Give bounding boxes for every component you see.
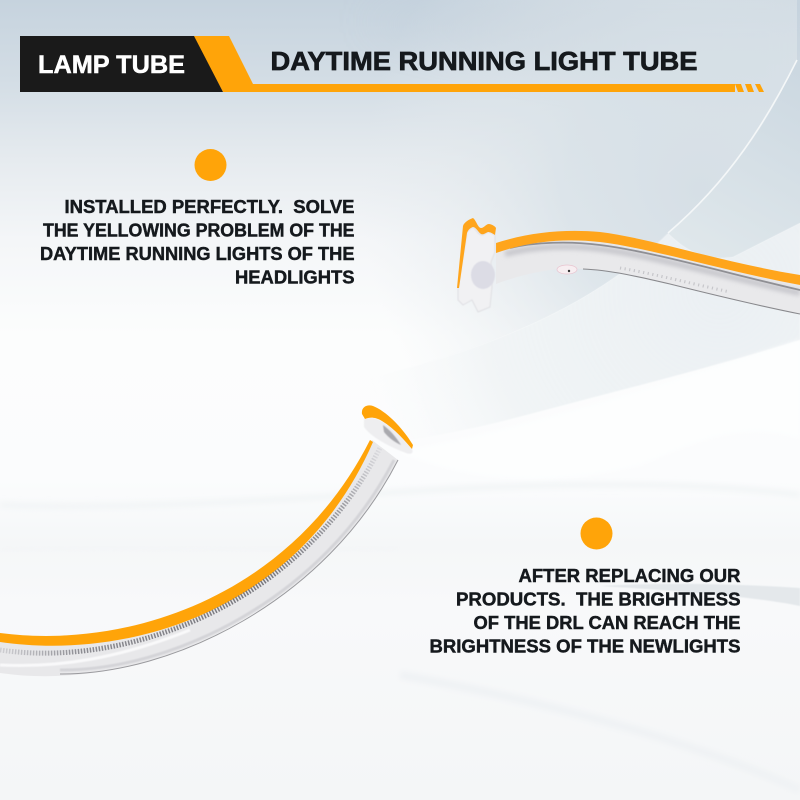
text block: after replacing: OF THE DRL CAN REACH THE [474, 613, 740, 633]
disc orange rim [362, 405, 413, 449]
main title: DAYTIME RUNNING LIGHT TUBE [270, 48, 698, 76]
orange header slash and underline [193, 36, 735, 92]
pink mark [557, 265, 577, 274]
black badge [20, 36, 223, 92]
orange strip [496, 231, 800, 285]
disc shading [383, 425, 401, 445]
text block: after replacing [430, 566, 741, 656]
orange strip [0, 440, 373, 646]
disc end cap [364, 418, 413, 454]
text block: installed perfectly: INSTALLED PERFECTLY. SOLVE [64, 197, 354, 217]
text block: after replacing: BRIGHTNESS OF THE NEWLIGHTS [430, 636, 740, 656]
text block: installed perfectly: DAYTIME RUNNING LIGHTS OF THE [40, 244, 354, 264]
tube lower edge [583, 269, 800, 314]
background swoosh: white lower band [400, 340, 800, 479]
badge label: LAMP TUBE [38, 51, 185, 79]
text block: installed perfectly: HEADLIGHTS [235, 268, 354, 288]
cap orange edge [457, 218, 496, 288]
tube lower edge [60, 460, 398, 674]
background streaks [0, 485, 800, 506]
tube body [496, 240, 800, 314]
background swoosh: right panel [668, 56, 800, 258]
cap lens [471, 261, 495, 289]
tube shading band [505, 247, 800, 293]
background: blue top-right tint [350, 0, 800, 120]
background swoosh: upper shaded sweep [340, 0, 797, 385]
tube inner dark line [510, 243, 800, 290]
text block: after replacing: AFTER REPLACING OUR [518, 566, 741, 586]
marker dot: top text [194, 149, 226, 181]
end cap [458, 228, 495, 312]
text block: installed perfectly: THE YELLOWING PROBLEM OF THE [43, 220, 354, 240]
comb teeth [0, 448, 380, 653]
text block: after replacing: PRODUCTS. THE BRIGHTNESS [456, 590, 740, 610]
white highlight [0, 630, 190, 666]
text block: installed perfectly [40, 197, 354, 288]
tube body [0, 440, 398, 676]
marker dot: bottom text [580, 518, 612, 550]
background swoosh: pale sweep below tube [340, 223, 800, 450]
underline stripes [735, 84, 764, 92]
small etched ticks [620, 268, 730, 292]
upper lamp tube [457, 218, 800, 314]
tube lower shading [60, 460, 394, 670]
background swoosh: white edge line [668, 60, 797, 233]
header: lamp tube badge and title [20, 36, 764, 92]
lower lamp tube [0, 405, 413, 676]
